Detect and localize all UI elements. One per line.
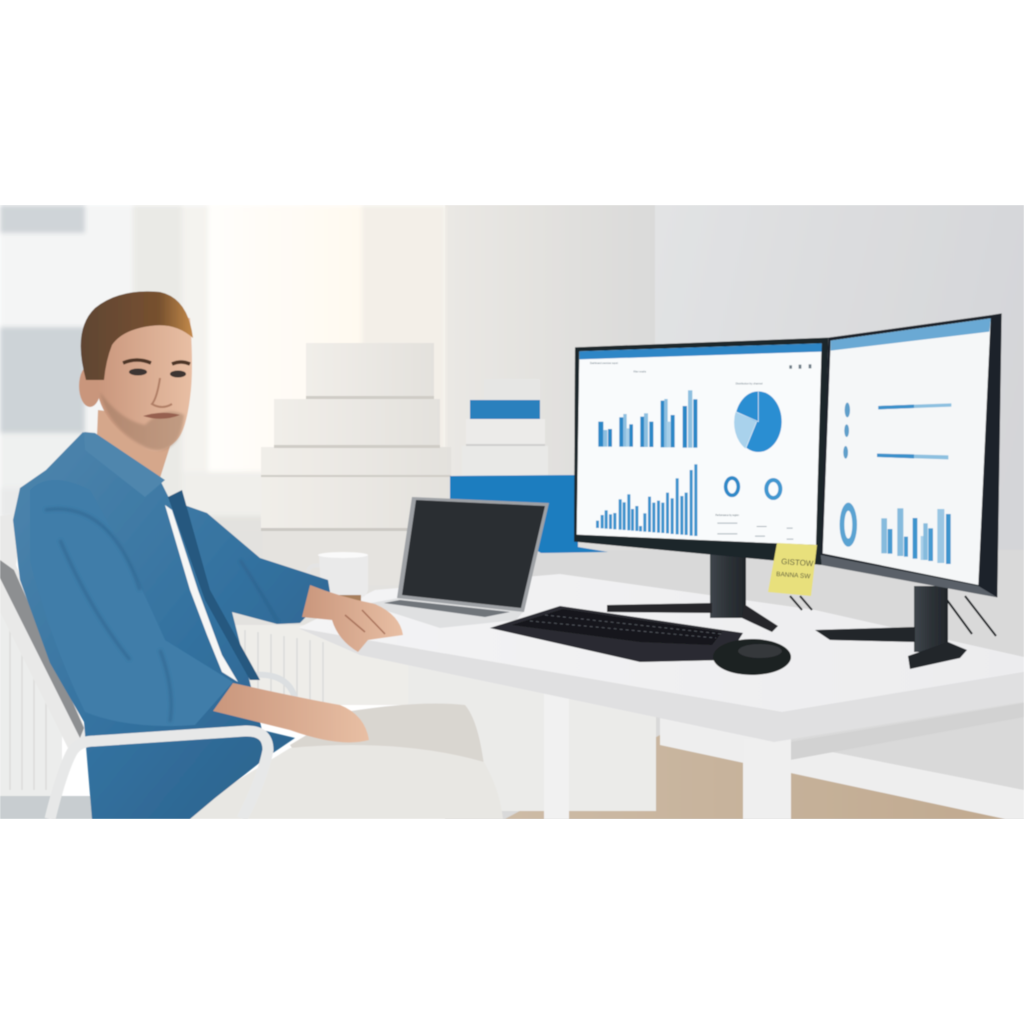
radiators	[0, 530, 418, 819]
head	[79, 291, 193, 452]
table	[715, 514, 793, 540]
monitor bezel	[821, 313, 1002, 597]
progress bars	[877, 403, 951, 459]
ear	[79, 365, 101, 407]
scene contents	[0, 205, 1024, 820]
eyes	[129, 368, 147, 376]
mouth	[143, 413, 180, 419]
photo illustration: analyst at desk	[0, 205, 1024, 819]
face	[97, 317, 192, 452]
nose shadow	[152, 378, 172, 407]
fingers	[345, 610, 385, 634]
seated man	[13, 291, 503, 819]
computer mouse	[713, 639, 791, 675]
left status rings	[843, 403, 850, 459]
table: Performance by region	[715, 514, 740, 517]
left monitor stand	[607, 552, 812, 632]
near thigh	[175, 745, 503, 819]
back wall	[445, 205, 1024, 820]
t-shirt front overlay	[165, 505, 238, 682]
sticky note	[768, 543, 817, 596]
sticky note: BANNA SW	[776, 571, 811, 580]
pie chart	[734, 382, 782, 452]
office chair	[0, 512, 296, 748]
laptop	[365, 497, 549, 628]
stubble	[100, 392, 184, 450]
keyboard	[490, 606, 743, 662]
left monitor with analytics dashboard	[574, 338, 828, 565]
neck	[97, 410, 172, 478]
eyebrows	[123, 360, 190, 364]
bottom bar chart	[596, 464, 697, 536]
small donut charts	[726, 478, 780, 498]
sleeve folds	[45, 509, 278, 722]
back thigh	[290, 704, 484, 765]
dashboard screen	[823, 318, 991, 585]
dashboard screen	[577, 343, 822, 545]
coffee mug	[318, 552, 368, 602]
toolbar icons and address text: Dashboard overview report	[590, 362, 618, 365]
photo frame	[0, 205, 1024, 820]
white t-shirt	[163, 500, 240, 690]
right monitor with dashboard	[821, 313, 1002, 597]
forearm and hand on desk	[302, 585, 403, 652]
denim shirt body	[13, 432, 330, 819]
large donut chart	[840, 503, 857, 547]
stack of white boxes	[261, 343, 451, 585]
blue and white storage boxes	[449, 399, 608, 554]
desk	[298, 574, 1024, 819]
window and frames	[0, 205, 446, 550]
shirt placket	[168, 490, 260, 680]
browser title bar	[579, 343, 822, 359]
collar	[84, 432, 165, 497]
right monitor stand	[815, 586, 996, 669]
toolbar icons and address text: Filter results	[633, 370, 647, 373]
forearm on lap	[213, 683, 369, 742]
browser title bar	[831, 318, 991, 351]
monitor bezel	[574, 338, 828, 565]
toolbar icons and address text	[590, 362, 811, 373]
rolled sleeve	[30, 480, 233, 726]
lower cabinet box	[408, 665, 656, 811]
sticky note: GISTOW	[781, 557, 814, 568]
top bar chart	[598, 390, 697, 448]
hair	[81, 291, 193, 380]
floor and baseboard	[505, 718, 1024, 819]
chair armrest	[50, 731, 268, 819]
pie chart: Distribution by channel	[736, 382, 763, 386]
right bar chart	[881, 508, 951, 564]
